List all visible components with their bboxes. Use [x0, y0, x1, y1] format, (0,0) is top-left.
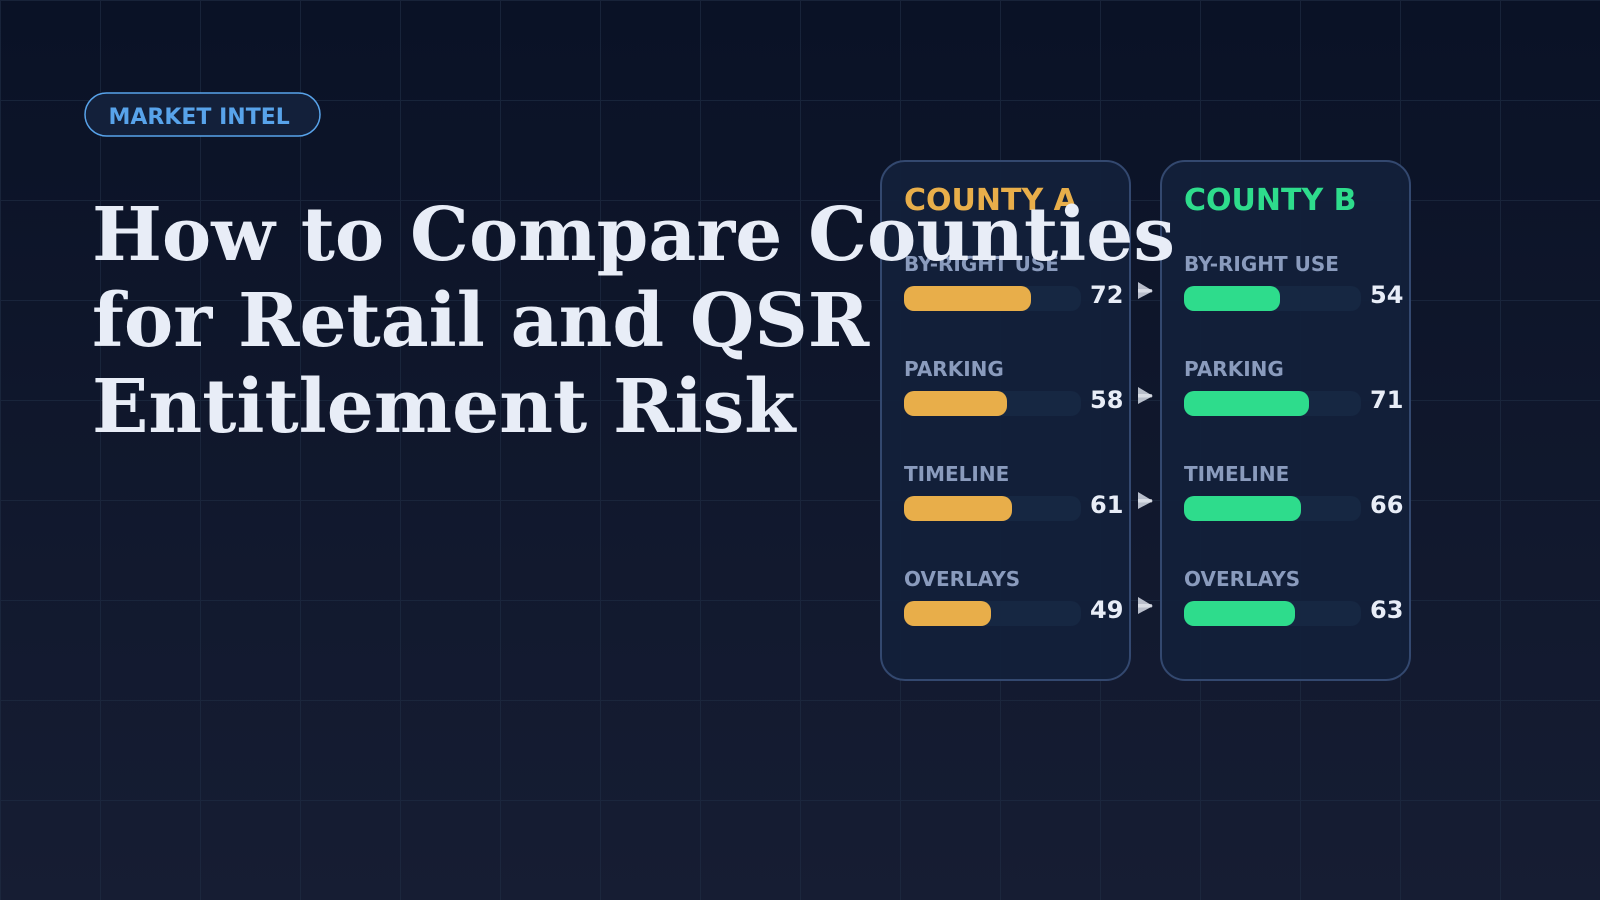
metric: by-right use 72: 72 — [1090, 281, 1123, 309]
metric: overlays 63: 63 — [1370, 596, 1403, 624]
metric: timeline 61: TIMELINE — [904, 462, 1009, 486]
heading: county A: COUNTY A — [904, 183, 1078, 218]
metric: parking 71 — [1184, 357, 1403, 416]
title: Entitlement Risk — [92, 364, 797, 450]
arrow: overlays — [1138, 597, 1153, 614]
tag: market intel — [85, 93, 320, 136]
metric: overlays 63 — [1184, 567, 1403, 626]
metric: by-right use 72 — [904, 252, 1123, 311]
metric: timeline 66 — [1184, 462, 1403, 521]
heading: county B: COUNTY B — [1184, 183, 1356, 218]
metric: by-right use 54: BY-RIGHT USE — [1184, 252, 1339, 276]
metric: overlays 49: 49 — [1090, 596, 1123, 624]
metric: by-right use 72: BY-RIGHT USE — [904, 252, 1059, 276]
metric: parking 71: 71 — [1370, 386, 1403, 414]
metric: timeline 61: 61 — [1090, 491, 1123, 519]
metric: timeline 61 — [904, 462, 1123, 521]
tag: market intel: MARKET INTEL — [108, 105, 290, 130]
metric: parking 71: PARKING — [1184, 357, 1284, 381]
metric: overlays 49 — [904, 567, 1123, 626]
panel: county B — [1161, 161, 1410, 680]
title: for Retail and QSR — [92, 278, 870, 364]
metric: parking 58: PARKING — [904, 357, 1004, 381]
metric: parking 58: 58 — [1090, 386, 1123, 414]
arrow: timeline — [1138, 492, 1153, 509]
metric: overlays 49: OVERLAYS — [904, 567, 1020, 591]
metric: timeline 66: 66 — [1370, 491, 1403, 519]
metric: overlays 63: OVERLAYS — [1184, 567, 1300, 591]
arrow: by-right use — [1138, 282, 1153, 299]
panel: county A — [881, 161, 1130, 680]
metric: by-right use 54 — [1184, 252, 1403, 311]
metric: timeline 66: TIMELINE — [1184, 462, 1289, 486]
metric: by-right use 54: 54 — [1370, 281, 1403, 309]
metric: parking 58 — [904, 357, 1123, 416]
title: How to Compare Counties — [92, 192, 1175, 278]
arrow: parking — [1138, 387, 1153, 404]
